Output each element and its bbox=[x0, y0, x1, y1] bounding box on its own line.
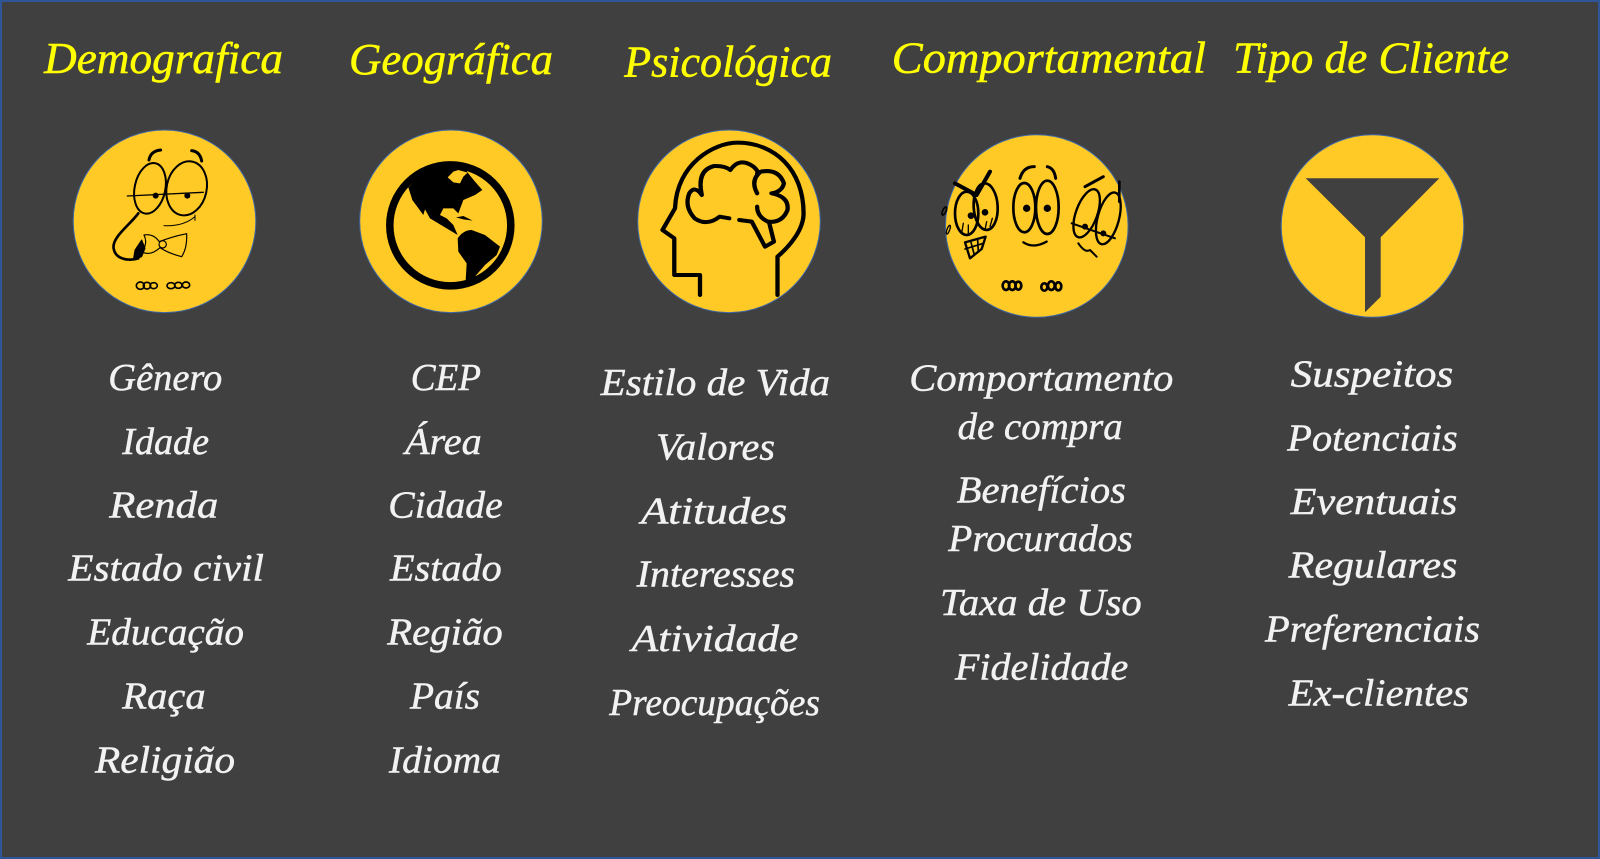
list: Tipo de Cliente items: Preferenciais bbox=[1264, 609, 1480, 651]
list: Psicológica items: Atitudes bbox=[637, 490, 787, 532]
list: Geográfica items: Estado bbox=[389, 548, 502, 590]
list: Demográfica items: Idade bbox=[121, 421, 209, 463]
list: Demográfica items: Estado civil bbox=[67, 548, 264, 590]
list: Psicológica items bbox=[600, 362, 830, 724]
list: Comportamental items: Fidelidade bbox=[954, 646, 1128, 688]
list: Psicológica items: Atividade bbox=[628, 618, 798, 660]
list: Geográfica items bbox=[386, 357, 503, 781]
list: Psicológica items: Estilo de Vida bbox=[600, 362, 830, 404]
list: Tipo de Cliente items: Ex-clientes bbox=[1288, 673, 1469, 715]
list: Demográfica items: Raça bbox=[121, 675, 206, 717]
icon: monocle face bbox=[73, 130, 256, 313]
heading: Psicológica: Psicológica bbox=[623, 38, 832, 87]
list: Comportamental items: Taxa de Uso bbox=[940, 582, 1142, 624]
list: Demográfica items bbox=[67, 357, 264, 781]
list: Comportamental items: Comportamento bbox=[909, 358, 1173, 400]
list: Demográfica items: Religião bbox=[94, 739, 235, 781]
list: Psicológica items: Preocupações bbox=[608, 682, 820, 724]
list: Geográfica items: Área bbox=[402, 421, 482, 463]
panel: Geográfica bbox=[349, 35, 553, 781]
list: Psicológica items: Interesses bbox=[636, 554, 795, 596]
panel: Comportamental bbox=[892, 34, 1206, 688]
list: Demográfica items: Educação bbox=[86, 612, 244, 654]
list: Geográfica items: CEP bbox=[411, 357, 481, 399]
list: Tipo de Cliente items: Regulares bbox=[1288, 544, 1457, 586]
heading: Comportamental: Comportamental bbox=[892, 34, 1206, 83]
heading: Geográfica: Geográfica bbox=[349, 35, 553, 84]
list: Geográfica items: Região bbox=[386, 612, 503, 654]
list: Tipo de Cliente items: Eventuais bbox=[1290, 481, 1457, 523]
list: Comportamental items: Procurados bbox=[947, 518, 1133, 560]
heading: Demografica: Demografica bbox=[43, 34, 283, 83]
list: Geográfica items: Cidade bbox=[388, 484, 503, 526]
list: Geográfica items: País bbox=[409, 675, 480, 717]
icon: three expressive faces bbox=[941, 135, 1128, 317]
panel: Demográfica bbox=[43, 34, 283, 781]
list: Tipo de Cliente items bbox=[1264, 354, 1480, 715]
panel: Psicológica bbox=[600, 38, 832, 724]
list: Tipo de Cliente items: Potenciais bbox=[1286, 418, 1458, 460]
list: Psicológica items: Valores bbox=[656, 426, 775, 468]
icon: head with brain bbox=[638, 130, 820, 313]
icon: funnel bbox=[1281, 135, 1464, 317]
list: Tipo de Cliente items: Suspeitos bbox=[1291, 354, 1453, 396]
panel: Tipo de Cliente bbox=[1233, 34, 1509, 715]
list: Comportamental items bbox=[909, 358, 1173, 688]
list: Comportamental items: de compra bbox=[958, 406, 1123, 448]
list: Demográfica items: Gênero bbox=[108, 357, 222, 399]
list: Demográfica items: Renda bbox=[108, 484, 218, 526]
list: Geográfica items: Idioma bbox=[388, 739, 501, 781]
heading: Tipo de Cliente: Tipo de Cliente bbox=[1233, 34, 1509, 83]
list: Comportamental items: Benefícios bbox=[957, 470, 1126, 512]
icon: globe bbox=[360, 130, 542, 313]
